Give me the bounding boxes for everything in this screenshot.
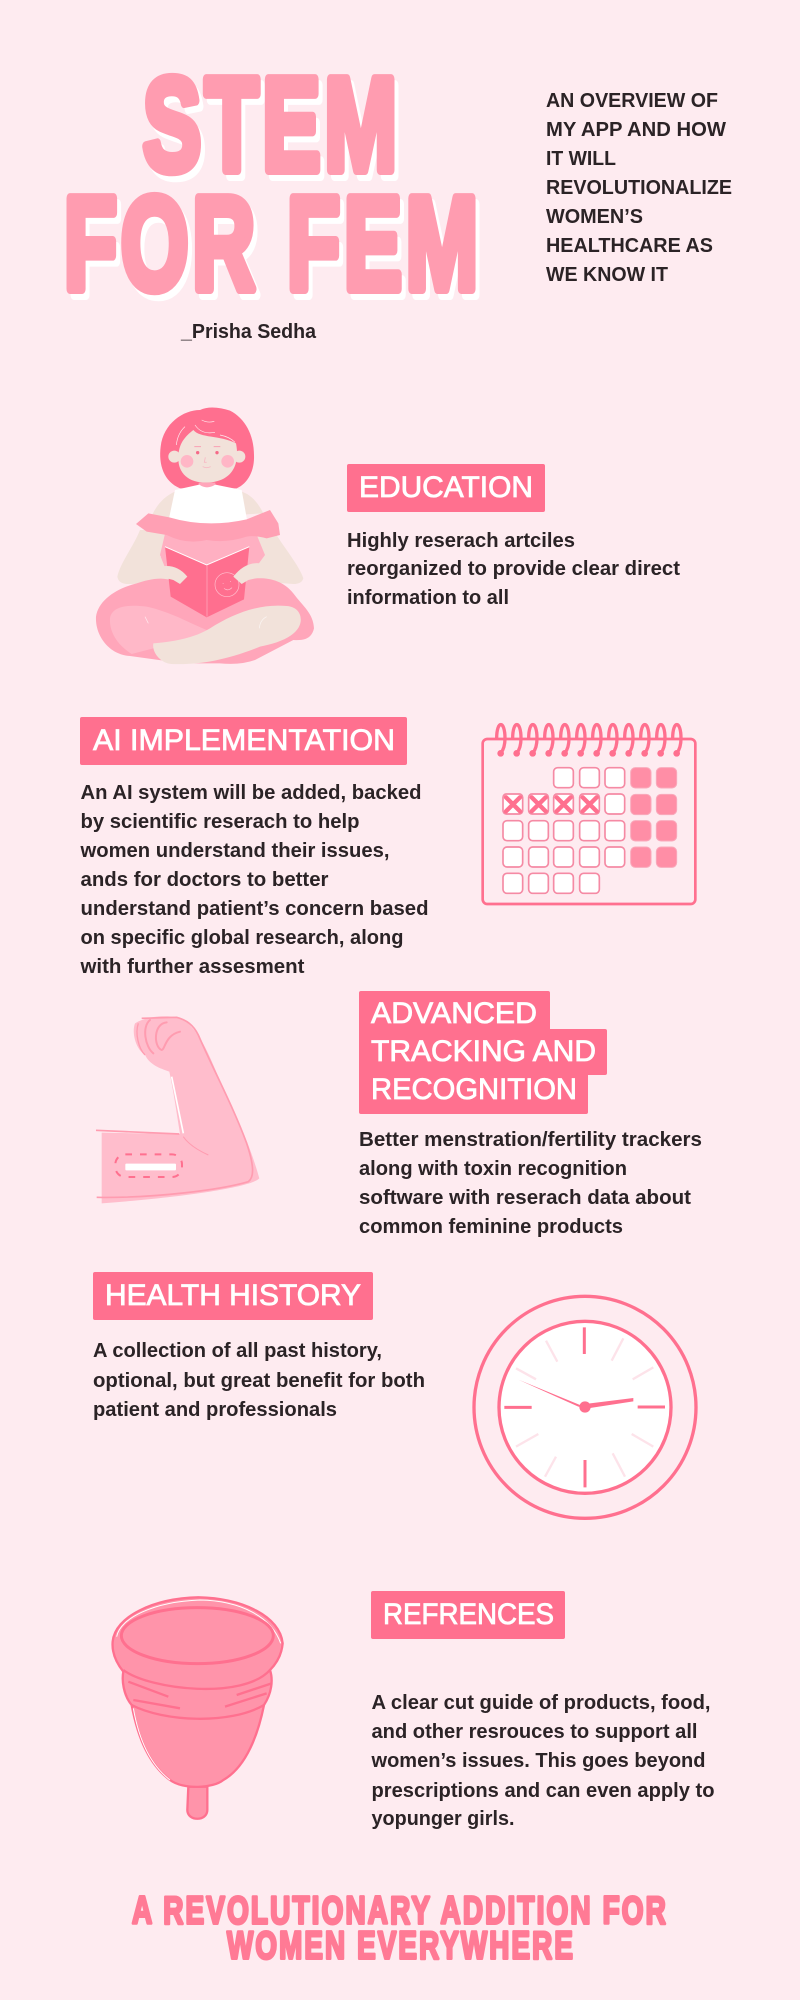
text: AI implementation: understand patient’s concern based — [80, 898, 429, 920]
text: education: reorganized to provide clear direct — [347, 558, 680, 580]
text: health history: A collection of all past history, — [93, 1340, 382, 1362]
illustration: woman reading — [96, 408, 314, 664]
text: references — [370, 1692, 714, 1830]
text: advanced tracking — [359, 1129, 702, 1238]
heading: education — [347, 464, 545, 512]
heading: advanced tracking and recognition: ADVANCED — [371, 997, 537, 1030]
subtitle: overview: IT WILL — [546, 148, 616, 170]
text: references: and other resrouces to support all — [372, 1721, 698, 1743]
panel: AI implementation — [79, 717, 429, 978]
text: advanced tracking: common feminine products — [359, 1216, 623, 1238]
text: advanced tracking: software with reserach data about — [359, 1187, 691, 1209]
subtitle: overview: WE KNOW IT — [546, 264, 668, 286]
heading: references — [371, 1591, 565, 1639]
panel: advanced tracking — [359, 991, 702, 1238]
footer tagline — [132, 1890, 668, 1968]
text: references: yopunger girls. — [372, 1808, 514, 1830]
text: education: Highly reserach artciles — [347, 530, 575, 552]
text: AI implementation: by scientific reserach to help — [80, 811, 360, 833]
heading: AI implementation: AI IMPLEMENTATION — [93, 724, 395, 757]
text: health history: patient and professionals — [93, 1399, 337, 1421]
text: education: information to all — [347, 587, 509, 609]
subtitle: overview: HEALTHCARE AS — [546, 235, 713, 257]
text: education — [347, 530, 680, 609]
author: _Prisha Sedha — [180, 321, 317, 343]
title — [64, 51, 486, 323]
panel: references — [370, 1591, 714, 1830]
text: AI implementation: with further assesment — [79, 956, 305, 978]
subtitle: overview: WOMEN’S — [546, 206, 643, 228]
heading: health history: HEALTH HISTORY — [105, 1279, 361, 1312]
illustration: menstrual cup — [113, 1597, 283, 1819]
text: AI implementation — [79, 782, 429, 978]
title: FOR FEM — [68, 176, 486, 323]
subtitle: overview: AN OVERVIEW OF — [546, 90, 718, 112]
text: health history — [93, 1340, 425, 1421]
panel: education — [347, 464, 680, 609]
heading: references: REFRENCES — [383, 1598, 554, 1631]
heading: advanced tracking and recognition: RECOGNITION — [371, 1073, 577, 1106]
text: health history: optional, but great benefit for both — [93, 1370, 425, 1392]
subtitle: overview — [546, 90, 732, 286]
subtitle: overview: MY APP AND HOW — [546, 119, 726, 141]
text: AI implementation: women understand their issues, — [79, 840, 390, 862]
text: AI implementation: An AI system will be added, backed — [80, 782, 422, 804]
text: advanced tracking: along with toxin recognition — [359, 1158, 627, 1180]
text: AI implementation: on specific global research, along — [80, 927, 404, 949]
text: references: A clear cut guide of products, food, — [372, 1692, 710, 1714]
subtitle: overview: REVOLUTIONALIZE — [546, 177, 732, 199]
text: advanced tracking: Better menstration/fertility trackers — [359, 1129, 702, 1151]
panel: health history — [93, 1272, 425, 1421]
footer tagline: WOMEN EVERYWHERE — [227, 1924, 575, 1968]
heading: education: EDUCATION — [359, 471, 533, 504]
heading: advanced tracking and recognition — [359, 991, 607, 1114]
title: FOR FEM — [64, 170, 482, 317]
illustration: calendar — [483, 725, 695, 904]
heading: advanced tracking and recognition: TRACKING AND — [371, 1035, 596, 1068]
text: AI implementation: ands for doctors to better — [80, 869, 329, 891]
text: references: prescriptions and can even apply to — [372, 1780, 714, 1802]
heading: AI implementation — [80, 717, 407, 765]
illustration: clock — [474, 1296, 696, 1518]
title: STEM — [143, 51, 401, 198]
text: references: women’s issues. This goes beyond — [370, 1750, 706, 1772]
illustration: flexed arm with implant — [96, 1016, 259, 1203]
heading: health history — [93, 1272, 373, 1320]
title: STEM — [147, 57, 405, 204]
